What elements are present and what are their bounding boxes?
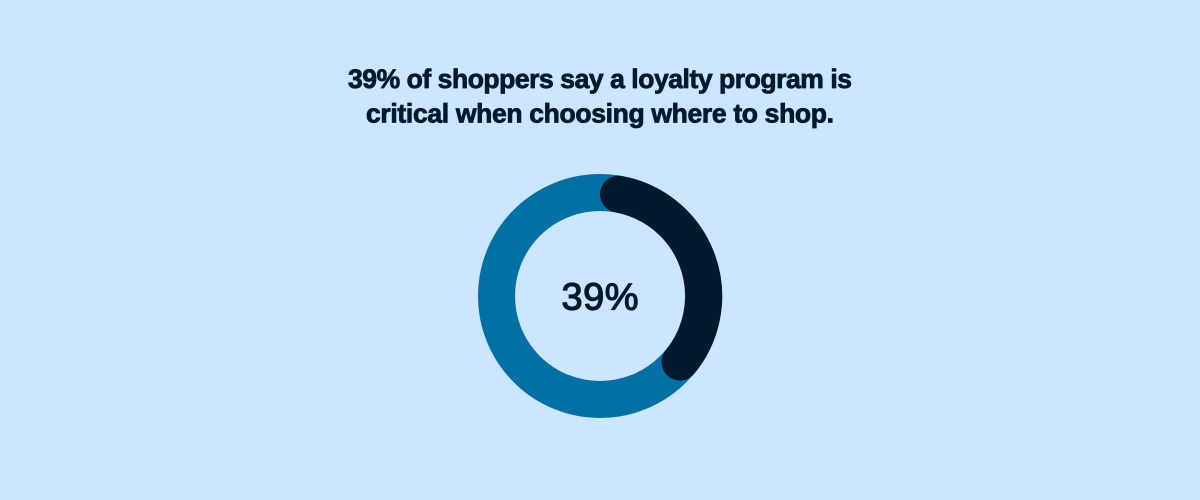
donut chart (496, 192, 704, 400)
title (348, 64, 852, 128)
title: 39% of shoppers say a loyalty program is (348, 64, 852, 94)
donut center value: 39% (562, 276, 638, 318)
title: critical when choosing where to shop. (366, 98, 834, 128)
donut track (496, 192, 704, 400)
donut value arc: 39% (618, 194, 704, 362)
